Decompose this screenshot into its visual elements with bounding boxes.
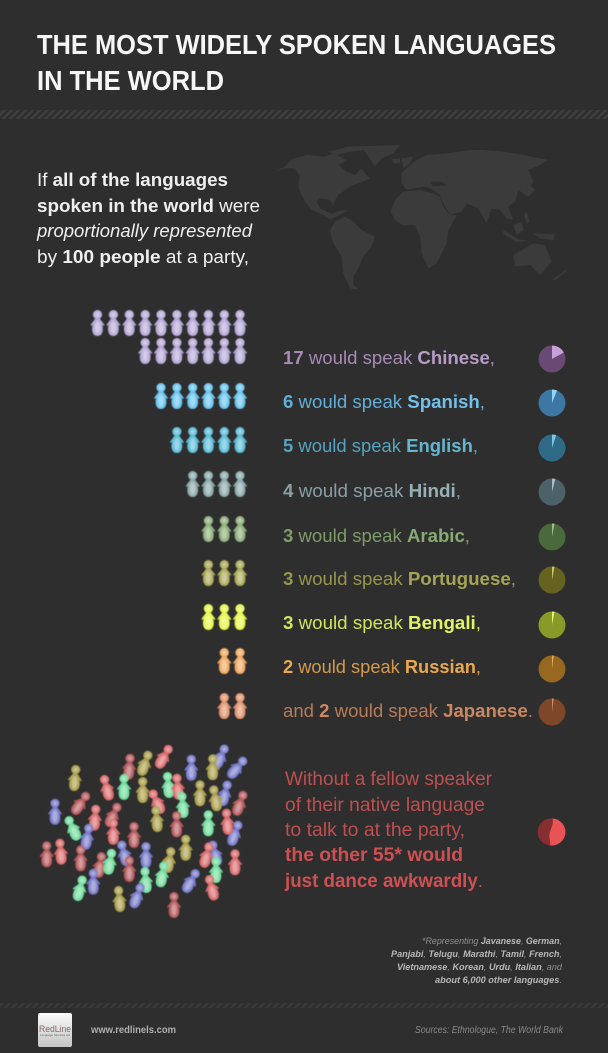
pie: Russian: [538, 655, 566, 682]
pie: Arabic: [538, 524, 566, 550]
row: Russian: [217, 648, 566, 682]
website: www.redlinels.com: [90, 1025, 176, 1036]
pie: Hindi: [538, 478, 566, 506]
intro text: spoken in the world were: [37, 196, 260, 216]
closing statement text: to talk to at the party,: [285, 820, 465, 841]
row: Hindi: [186, 471, 565, 506]
label: Japanese: and 2 would speak Japanese.: [283, 701, 533, 721]
row: Portuguese: [201, 560, 566, 594]
intro text: [36, 170, 260, 267]
people: 4: [186, 471, 247, 497]
row: English: [170, 427, 566, 462]
crowd of 55 dancing people: [40, 742, 251, 918]
people: 2: [217, 693, 247, 719]
pie: Portuguese: [538, 566, 566, 594]
label: Arabic: 3 would speak Arabic,: [283, 526, 470, 546]
row: Bengali: [201, 604, 566, 638]
people: 6: [154, 383, 247, 409]
row: Japanese: [217, 693, 566, 726]
world map: [273, 145, 567, 289]
footnote: [391, 936, 563, 986]
label: Chinese: 17 would speak Chinese,: [283, 348, 495, 368]
logo: RedLine: [38, 1013, 72, 1047]
pie: other 55: [538, 818, 566, 846]
people: 2: [217, 648, 247, 674]
people: 3: [201, 604, 247, 630]
label: Portuguese: 3 would speak Portuguese,: [283, 569, 516, 589]
closing statement text: [284, 769, 493, 892]
title: THE MOST WIDELY SPOKEN LANGUAGES: [37, 29, 556, 60]
footnote: *Representing Javanese, German,: [422, 936, 562, 947]
intro text: by 100 people at a party,: [37, 247, 249, 267]
pie: English: [538, 434, 566, 462]
footnote: Vietnamese, Korean, Urdu, Italian, and: [397, 962, 563, 973]
label: Hindi: 4 would speak Hindi,: [283, 481, 461, 501]
title: IN THE WORLD: [37, 65, 224, 96]
people: 3: [201, 516, 247, 542]
logo: RedLine: Language Services Ltd: [40, 1033, 71, 1037]
label: Bengali: 3 would speak Bengali,: [283, 613, 481, 633]
pie: Japanese: [538, 698, 566, 726]
title: [37, 29, 556, 96]
intro text: If all of the languages: [37, 170, 228, 190]
people: 5: [170, 427, 247, 453]
label: Spanish: 6 would speak Spanish,: [283, 392, 485, 412]
logo: RedLine: RedLine: [39, 1024, 71, 1035]
label: Russian: 2 would speak Russian,: [283, 657, 481, 677]
sources: Sources: Ethnologue, The World Bank: [415, 1025, 564, 1036]
intro text: proportionally represented: [36, 221, 253, 241]
footnote: Panjabi, Telugu, Marathi, Tamil, French,: [391, 949, 562, 960]
footnote: about 6,000 other languages.: [435, 975, 562, 986]
closing statement text: just dance awkwardly.: [284, 871, 483, 892]
pie: Bengali: [538, 612, 566, 638]
people: 17: [90, 310, 247, 364]
row: Spanish: [154, 383, 566, 416]
pie: Spanish: [538, 389, 566, 416]
label: English: 5 would speak English,: [283, 436, 478, 456]
row: Arabic: [201, 516, 566, 550]
people: 3: [201, 560, 247, 586]
closing statement text: Without a fellow speaker: [285, 769, 493, 790]
pie: Chinese: [538, 346, 566, 372]
closing statement text: the other 55* would: [285, 845, 463, 866]
row: Chinese: [90, 310, 566, 372]
closing statement text: of their native language: [285, 795, 485, 816]
